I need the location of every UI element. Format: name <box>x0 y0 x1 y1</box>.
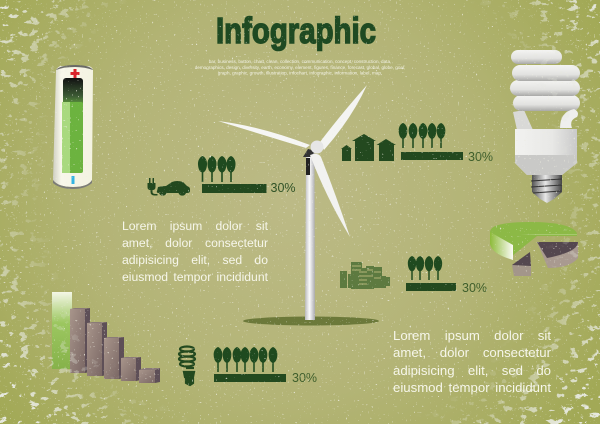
row: car energy <box>148 156 296 196</box>
text block: right paragraph: Lorem ipsum dolor sit <box>393 328 551 343</box>
blade: right <box>320 85 367 150</box>
icon: compact fluorescent bulb <box>510 50 580 203</box>
text block: right paragraph <box>393 328 551 395</box>
text block: left paragraph: Lorem ipsum dolor sit <box>122 219 268 233</box>
row: car energy: 30% <box>270 181 296 195</box>
pie: small slice <box>512 265 531 276</box>
pie: brown slice <box>537 242 578 268</box>
title: Infographic <box>216 10 376 51</box>
text block: right paragraph: adipisicing elit, sed do <box>393 363 551 378</box>
green column <box>52 292 72 369</box>
pie chart <box>490 222 578 276</box>
text block: left paragraph: amet, dolor consectetur <box>122 236 268 250</box>
icon: plug and car <box>148 178 190 196</box>
row: houses <box>341 123 493 164</box>
hub <box>310 140 324 154</box>
keyword text block: demographics, design, diversity, earth, economy, element, figures, finance, forecast, global, globe, goal, <box>195 65 405 70</box>
wind turbine <box>218 85 367 320</box>
icon: battery <box>53 65 93 189</box>
text block: left paragraph: eiusmod tempor incididunt <box>122 270 268 284</box>
brown columns <box>70 309 85 373</box>
tower <box>305 153 315 320</box>
blade: lower <box>310 154 350 237</box>
blade: left <box>218 121 310 148</box>
keyword text block <box>195 59 405 76</box>
keyword text block: bar, business, button, chart, clean, collection, communication, concept, construction, data, <box>209 59 391 64</box>
row: bulb energy <box>179 346 317 385</box>
text block: right paragraph: amet, dolor consectetur <box>393 345 551 360</box>
icon: city <box>340 262 390 289</box>
text block: left paragraph: adipisicing elit, sed do <box>122 253 268 267</box>
text block: left paragraph <box>122 219 268 284</box>
screw <box>532 175 562 203</box>
icon: small bulb <box>179 346 195 385</box>
icon: houses <box>341 134 396 161</box>
row: city: 30% <box>462 281 487 295</box>
row: city <box>340 256 487 295</box>
row: houses: 30% <box>468 150 493 164</box>
keyword text block: graph, graphic, growth, illustration, infochart, infographic, information, label, map, <box>218 70 382 76</box>
bar chart <box>52 292 160 383</box>
base <box>515 129 577 175</box>
icon: turbine shadow <box>243 316 379 326</box>
text block: right paragraph: eiusmod tempor incididunt <box>393 380 551 395</box>
coils <box>513 110 533 130</box>
row: bulb energy: 30% <box>292 371 317 385</box>
pie: green slice <box>490 222 577 256</box>
